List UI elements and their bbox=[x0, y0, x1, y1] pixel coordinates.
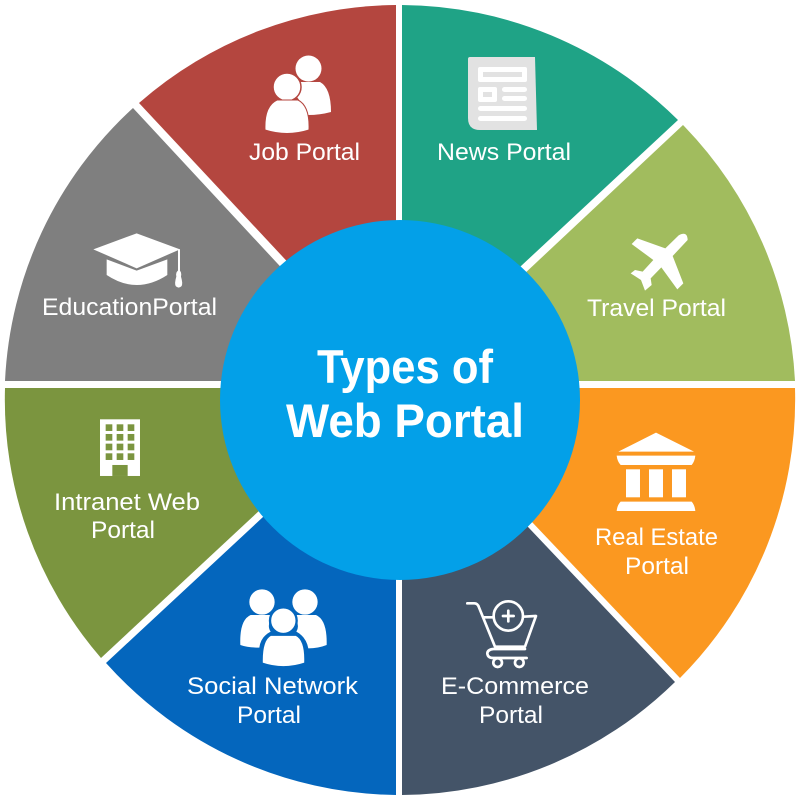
label: social network portal: Social Network bbox=[187, 673, 359, 700]
icon: social group bbox=[240, 589, 327, 667]
label: real estate portal: Real Estate bbox=[595, 524, 718, 551]
title: Web Portal bbox=[286, 394, 524, 447]
label: social network portal: Portal bbox=[237, 702, 301, 729]
label: intranet web portal: Intranet Web bbox=[54, 489, 200, 516]
label: e-commerce portal: E-Commerce bbox=[441, 673, 589, 700]
center hub bbox=[220, 220, 580, 580]
panel: real estate portal bbox=[405, 388, 795, 678]
label: real estate portal: Portal bbox=[625, 553, 689, 580]
label: real estate portal bbox=[595, 524, 718, 580]
panel: job portal bbox=[139, 5, 396, 378]
title: Types of bbox=[317, 340, 493, 393]
panel: social network portal bbox=[106, 393, 396, 795]
icon: office building bbox=[100, 419, 140, 476]
label: news portal: News Portal bbox=[437, 139, 571, 166]
label: social network portal bbox=[187, 673, 359, 729]
panel: news portal bbox=[402, 5, 678, 377]
label: e-commerce portal: Portal bbox=[479, 702, 543, 729]
panel: education portal bbox=[5, 108, 387, 381]
label: education portal: EducationPortal bbox=[42, 294, 217, 321]
label: travel portal: Travel Portal bbox=[587, 295, 726, 322]
icon: job people bbox=[265, 56, 331, 134]
icon: newspaper bbox=[468, 57, 537, 130]
icon: graduation cap bbox=[93, 233, 182, 288]
icon: bank building bbox=[617, 433, 695, 511]
panel: intranet web portal bbox=[5, 388, 391, 658]
label: intranet web portal bbox=[54, 489, 200, 544]
icon: airplane bbox=[631, 234, 688, 291]
label: e-commerce portal bbox=[441, 673, 589, 729]
panel: travel portal bbox=[410, 125, 795, 381]
icon: shopping cart bbox=[467, 601, 536, 667]
label: intranet web portal: Portal bbox=[91, 517, 155, 544]
panel: e-commerce portal bbox=[402, 394, 675, 795]
label: job portal: Job Portal bbox=[249, 139, 360, 166]
title bbox=[286, 340, 524, 447]
